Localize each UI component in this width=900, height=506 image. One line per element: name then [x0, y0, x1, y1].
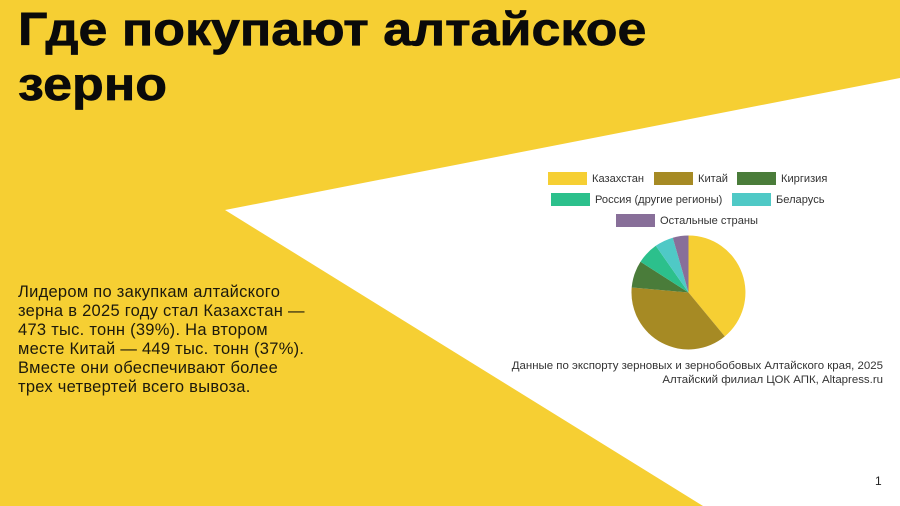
text block: summary: месте Китай — 449 тыс. тонн (37%). [18, 340, 304, 358]
legend item: Китай: Китай [698, 173, 728, 185]
slice: Китай 37% [631, 288, 725, 349]
slice: Остальные страны [673, 235, 688, 292]
legend [548, 172, 827, 227]
legend item: Беларусь: Беларусь [776, 194, 825, 206]
page number: 1 [875, 474, 882, 488]
source caption: Алтайский филиал ЦОК АПК, Altapress.ru [662, 374, 883, 386]
legend item: Киргизия [737, 172, 827, 185]
slice: Киргизия [632, 262, 688, 292]
legend item: Казахстан [548, 172, 644, 185]
source caption: Данные по экспорту зерновых и зернобобовых Алтайского края, 2025 [512, 360, 883, 372]
pie chart [632, 236, 746, 350]
slice: Казахстан 39% [688, 236, 745, 336]
legend item: Остальные страны: Остальные страны [660, 215, 758, 227]
legend item: Казахстан: Казахстан [592, 173, 644, 185]
title [18, 3, 646, 110]
legend item: Беларусь [732, 193, 825, 206]
text block: summary: зерна в 2025 году стал Казахстан — [18, 302, 305, 320]
legend item: Россия [551, 193, 722, 206]
legend item: Киргизия: Киргизия [781, 173, 827, 185]
title: Где покупают алтайское [18, 3, 646, 55]
source caption [512, 360, 883, 386]
legend item: Остальные страны [616, 214, 758, 227]
text block: summary [18, 283, 305, 396]
text block: summary: Лидером по закупкам алтайского [18, 283, 280, 301]
text block: summary: Вместе они обеспечивают более [18, 359, 278, 377]
title: зерно [18, 58, 167, 110]
slice: Россия [640, 246, 688, 292]
slice: Беларусь [656, 238, 688, 292]
legend item: Китай [654, 172, 728, 185]
text block: summary: трех четвертей всего вывоза. [18, 378, 251, 396]
legend item: Россия: Россия (другие регионы) [595, 194, 722, 206]
text block: summary: 473 тыс. тонн (39%). На втором [18, 321, 268, 339]
